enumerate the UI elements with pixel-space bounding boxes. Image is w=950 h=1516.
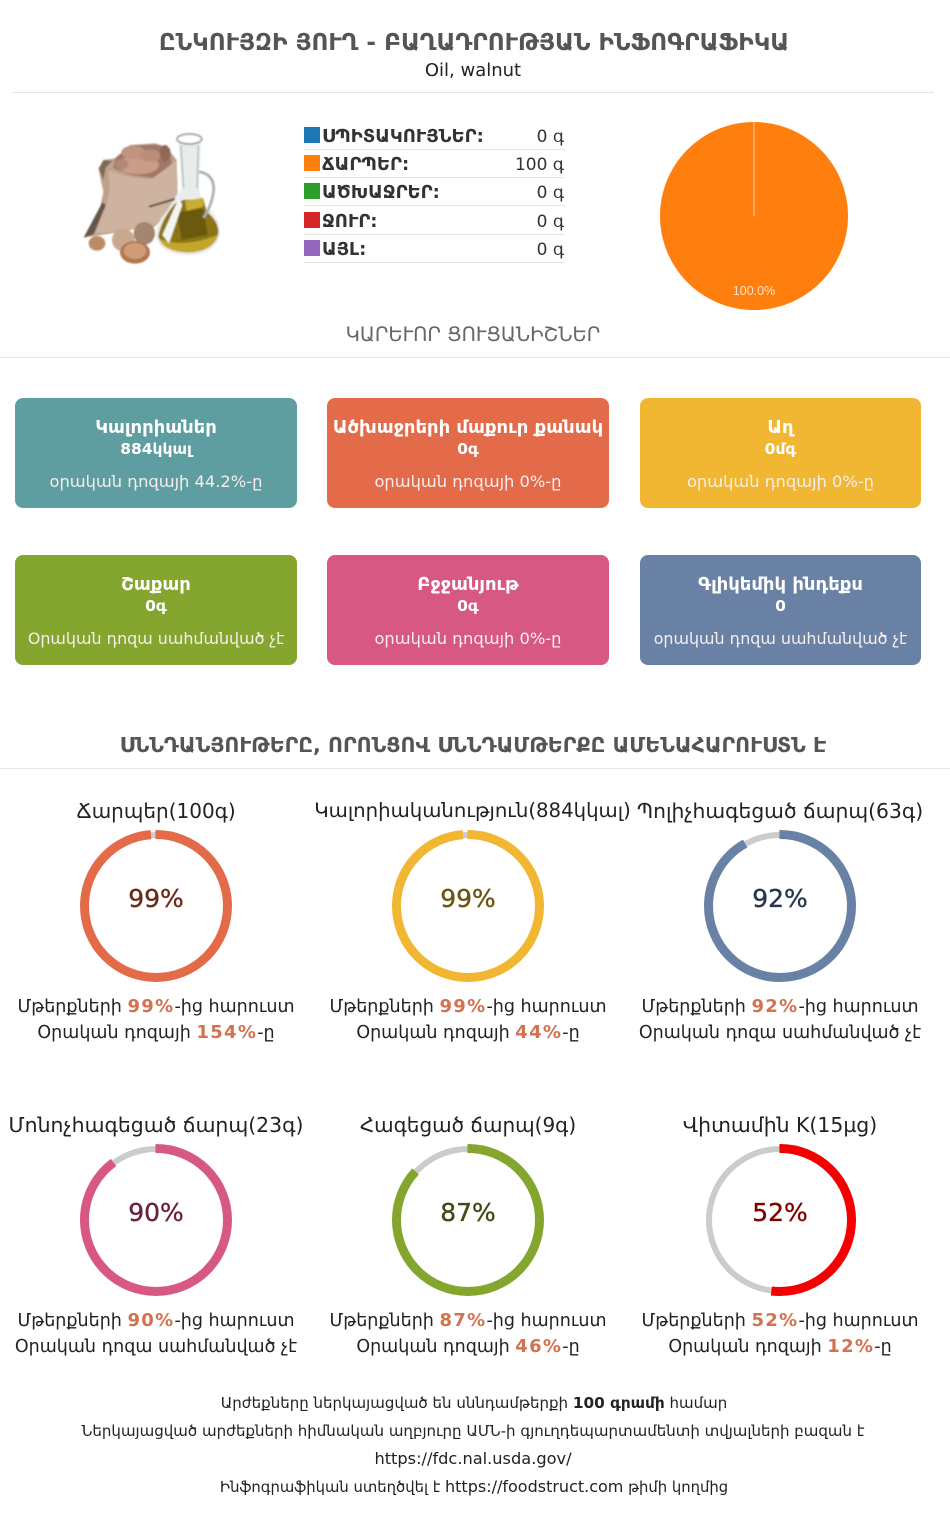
ring block: calories: 99% [440,884,496,913]
legend row: proteins [304,121,565,150]
card: salt: 0մգ [765,440,796,458]
ring block: vitamin K: Վիտամին K(15µg) [683,1113,877,1137]
legend row: other: 0 գ [537,240,564,260]
footer line: source url: https://fdc.nal.usda.gov/ [374,1449,572,1468]
walnuts [134,222,155,245]
ring block: monounsaturated fat [9,1113,303,1357]
ring block: fats: Մթերքների 99%-ից հարուստ [17,996,295,1017]
card: salt: օրական դոզայի 0%-ը [687,472,874,491]
illustration: sack of walnuts and oil jug [83,132,220,265]
card: sugar: Օրական դոզա սահմանված չէ [28,629,284,648]
card: salt [640,398,921,508]
card: net carbs: օրական դոզայի 0%-ը [374,472,562,491]
legend row: fats [304,149,565,178]
legend row: other [304,234,565,262]
ring block: vitamin K: Մթերքների 52%-ից հարուստ [641,1310,919,1331]
card: fiber: Բջջանյութ [417,574,519,595]
ring block: monounsaturated fat: Օրական դոզա սահմանված չէ [15,1337,297,1357]
ring block: polyunsaturated fat [637,799,923,1043]
card: sugar: 0գ [145,597,167,615]
subtitle: Oil, walnut [425,60,521,81]
panel: nutrient legend table [304,126,565,263]
ring block: fats: Ճարպեր(100գ) [76,799,236,823]
ring block: saturated fat [329,1113,607,1357]
card: fiber: 0գ [457,597,479,615]
legend row: fats: ՃԱՐՊԵՐ: [322,154,409,175]
ring block: vitamin K [641,1113,919,1357]
ring block: fats: 99% [128,884,184,913]
footer line: data source: Ներկայացված արժեքների հիմնական աղբյուրը ԱՄՆ-ի գյուղդեպարտամենտի տվյալների բազան է [81,1422,865,1440]
card: glycemic index: Գլիկեմիկ ինդեքս [698,574,863,595]
legend row: proteins: ՍՊԻՏԱԿՈՒՅՆԵՐ: [322,126,484,147]
oil [158,199,218,252]
legend row: fats: 100 գ [515,155,564,175]
ring block: calories [314,799,631,1043]
ring block: calories: Մթերքների 99%-ից հարուստ [329,996,607,1017]
ring block: vitamin K: 52% [752,1198,808,1227]
legend row: carbohydrates: ԱԾԽԱՋՐԵՐ: [322,182,440,203]
ring block: fats: Օրական դոզայի 154%-ը [37,1022,275,1043]
card: fiber [327,555,609,665]
pie chart: 100.0% [733,284,775,298]
card: net carbs: Ածխաջրերի մաքուր քանակ [333,417,603,438]
footer line: per 100 grams: Արժեքները ներկայացված են սննդամթերքի 100 գրամի համար [221,1394,727,1412]
legend row: proteins: 0 գ [537,127,564,147]
heading: key indicators: ԿԱՐԵՒՈՐ ՑՈՒՑԱՆԻՇՆԵՐ [346,323,600,346]
legend row: other: ԱՅԼ: [322,238,366,260]
ring block: saturated fat: Օրական դոզայի 46%-ը [356,1336,580,1357]
card: glycemic index: 0 [775,597,786,615]
card: fiber: օրական դոզայի 0%-ը [374,629,562,648]
ring block: polyunsaturated fat: Մթերքների 92%-ից հարուստ [641,996,919,1017]
pie chart [660,122,848,310]
ring block: calories: Կալորիականություն(884կկալ) [314,799,631,822]
card: calories: Կալորիաներ [95,417,217,438]
ring block: monounsaturated fat: Մթերքների 90%-ից հարուստ [17,1310,295,1331]
ring block: calories: Օրական դոզայի 44%-ը [356,1022,580,1043]
heading: top nutrients: ՍՆՆԴԱՆՅՈՒԹԵՐԸ, ՈՐՈՆՑՈՎ ՍՆՆԴԱՄԹԵՐՔԸ ԱՄԵՆԱՀԱՐՈՒՍՏՆ Է [120,733,826,757]
ring block: fats [17,799,295,1043]
card: calories: 884կկալ [120,440,192,458]
legend row: water: ՋՈՒՐ: [322,210,378,232]
card: calories [15,398,297,508]
card: glycemic index: օրական դոզա սահմանված չէ [654,629,907,648]
ring block: saturated fat: Մթերքների 87%-ից հարուստ [329,1310,607,1331]
ring block: saturated fat: 87% [440,1198,496,1227]
ring block: polyunsaturated fat: Օրական դոզա սահմանված չէ [639,1023,921,1043]
legend row: carbohydrates: 0 գ [537,183,564,203]
ring block: polyunsaturated fat: Պոլիչհագեցած ճարպ(63գ) [637,799,923,823]
legend row: water [304,206,565,234]
legend row: water: 0 գ [537,212,564,232]
legend row: carbohydrates [304,177,565,206]
card: glycemic index [640,555,921,665]
jug glass [156,138,220,255]
card: sugar [15,555,297,665]
card: sugar: Շաքար [121,574,191,595]
ring block: vitamin K: Օրական դոզայի 12%-ը [668,1336,892,1357]
ring block: polyunsaturated fat: 92% [752,884,808,913]
ring block: saturated fat: Հագեցած ճարպ(9գ) [360,1113,576,1137]
ring block: monounsaturated fat: 90% [128,1198,184,1227]
ring block: monounsaturated fat: Մոնոչհագեցած ճարպ(23գ) [9,1113,303,1137]
card: salt: Աղ [767,417,794,438]
card: calories: օրական դոզայի 44.2%-ը [50,472,262,491]
card: net carbs: 0գ [457,440,479,458]
card: net carbs [327,398,609,508]
footer notes [81,1394,865,1496]
footer line: credit: Ինֆոգրաֆիկան ստեղծվել է https://foodstruct.com թիմի կողմից [220,1477,728,1496]
title: ԸՆԿՈՒՅԶԻ ՅՈՒՂ - ԲԱՂԱԴՐՈՒԹՅԱՆ ԻՆՖՈԳՐԱՖԻԿԱ [159,29,789,56]
